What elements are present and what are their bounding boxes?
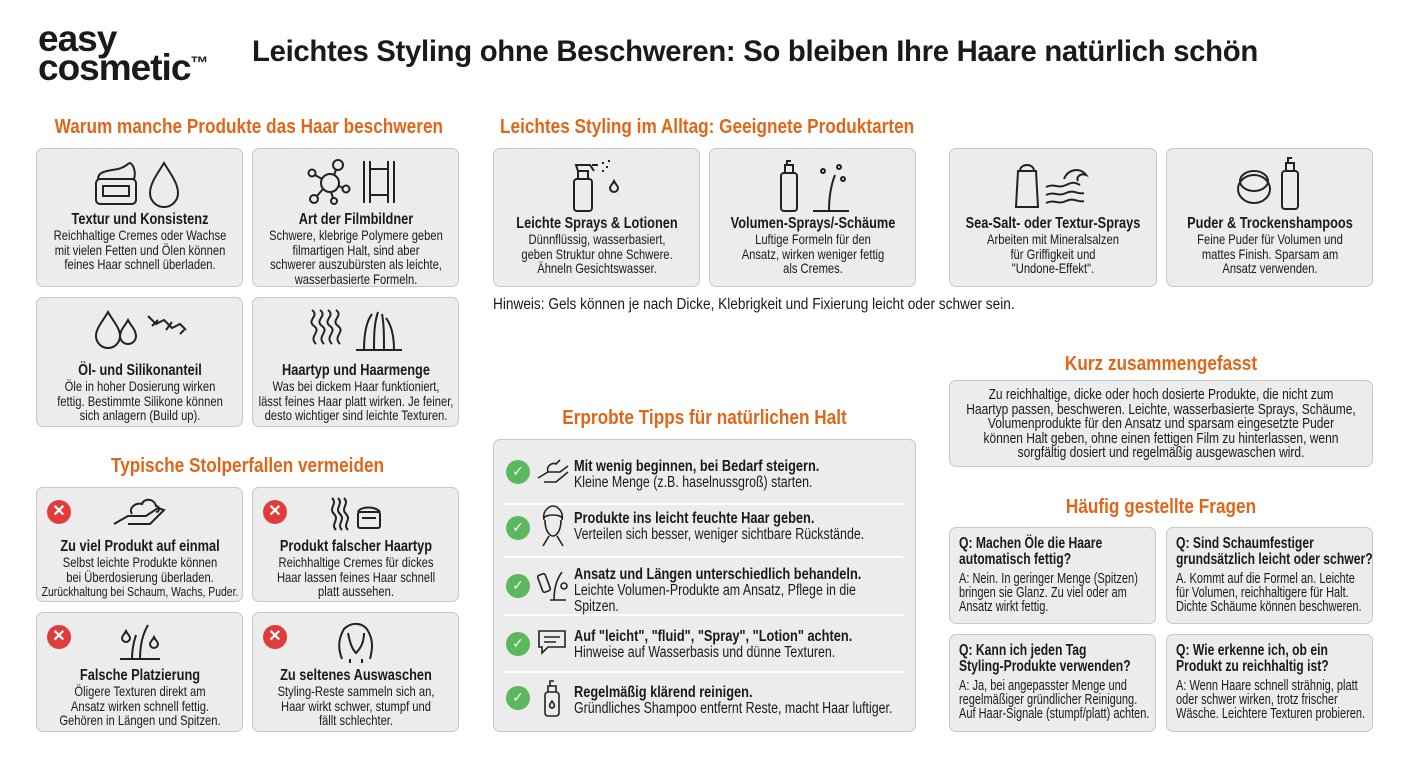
faq 2: Q: Sind Schaumfestiger — [1176, 535, 1314, 552]
tip 3: Leichte Volumen-Produkte am Ansatz, Pflege in die — [574, 582, 856, 599]
card: filmbildner: filmartigen Halt, sind aber — [292, 242, 419, 258]
card: volumen: Ansatz, wirken weniger fettig — [741, 246, 884, 262]
faq 4: Produkt zu reichhaltig ist? — [1176, 658, 1329, 674]
card: falscher haartyp: platt aussehen. — [318, 583, 393, 599]
summary box: Volumenprodukte für den Ansatz und sparsam eingesetzte Puder — [988, 415, 1334, 432]
icon: drops on hair root — [120, 624, 160, 660]
card: falscher haartyp: Produkt falscher Haartyp — [279, 538, 432, 555]
card: haartyp: lässt feines Haar platt wirken. Je feiner, — [258, 392, 453, 408]
card: filmbildner: Art der Filmbildner — [298, 211, 413, 228]
card: textur: Reichhaltige Cremes oder Wachse — [53, 227, 226, 243]
card: falscher haartyp: ✕ — [268, 503, 282, 520]
icon: cream jar and drop — [95, 161, 179, 208]
card: volumen: Luftige Formeln für den — [755, 231, 870, 247]
logo: easy — [38, 18, 116, 59]
card: textur: feines Haar schnell überladen. — [64, 256, 215, 272]
card: textur: Textur und Konsistenz — [71, 211, 208, 228]
tip 2 — [506, 505, 864, 546]
faq 3: A: Ja, bei angepasster Menge und — [959, 678, 1127, 694]
card: zu viel produkt: Zu viel Produkt auf einmal — [60, 538, 219, 555]
heading: faq: Häufig gestellte Fragen — [1066, 496, 1256, 518]
tip 3: Ansatz und Längen unterschiedlich behandeln. — [574, 566, 861, 583]
heading: leichtes styling: Leichtes Styling im Alltag: Geeignete Produktarten — [500, 116, 914, 138]
tip 4: ✓ — [512, 636, 524, 652]
summary box — [949, 380, 1373, 467]
card: filmbildner — [252, 148, 459, 287]
card: platzierung: Gehören in Längen und Spitzen. — [59, 712, 220, 728]
card: sprays: Ähneln Gesichtswasser. — [537, 260, 656, 276]
tip 2: Verteilen sich besser, weniger sichtbare Rückstände. — [574, 526, 864, 543]
tip 3: ✓ — [512, 578, 524, 594]
card: sprays — [493, 148, 700, 287]
card: platzierung: Falsche Platzierung — [79, 667, 200, 684]
card: oel: Öle in hoher Dosierung wirken — [64, 378, 215, 394]
card: sea salt: Arbeiten mit Mineralsalzen — [987, 231, 1119, 247]
faq 4: oder schwer wirken, trotz frischer — [1176, 692, 1338, 708]
icon: hand with foam — [114, 498, 166, 525]
tip 1: Kleine Menge (z.B. haselnussgroß) starten. — [574, 474, 812, 491]
card: volumen — [709, 148, 916, 287]
faq 3: regelmäßiger gründlicher Reinigung. — [959, 692, 1137, 708]
faq 1: Ansatz wirkt fettig. — [959, 599, 1048, 615]
tip 3 — [506, 566, 861, 615]
icon: hair and jar — [331, 497, 381, 531]
card: haartyp: Was bei dickem Haar funktioniert, — [272, 378, 439, 394]
tip 2: Produkte ins leicht feuchte Haar geben. — [574, 510, 814, 527]
faq 1: Q: Machen Öle die Haare — [959, 535, 1102, 552]
card: filmbildner: schwerer auszubürsten als leichte, — [270, 256, 441, 272]
card: filmbildner: Schwere, klebrige Polymere geben — [269, 227, 442, 243]
card: volumen: Volumen-Sprays/-Schäume — [730, 215, 895, 232]
icon: drops and silicone chain — [95, 310, 187, 349]
card: sea salt — [949, 148, 1157, 287]
card: zu viel produkt: Zurückhaltung bei Schaum, Wachs, Puder. — [41, 584, 238, 599]
card: zu viel produkt: ✕ — [52, 503, 66, 520]
card: falscher haartyp: Haar lassen feines Haar schnell — [276, 568, 435, 584]
faq 1: automatisch fettig? — [959, 550, 1071, 568]
faq 3: Auf Haar-Signale (stumpf/platt) achten. — [959, 706, 1149, 722]
logo — [38, 18, 207, 88]
icon: hair strands — [310, 309, 402, 351]
icon: salt shaker and wave — [1014, 164, 1089, 208]
summary box: Haartyp passen, beschweren. Leichte, wasserbasierte Sprays, Schäume, — [966, 401, 1356, 418]
tip 4 — [506, 628, 852, 661]
faq 1 — [949, 527, 1156, 624]
heading: warum: Warum manche Produkte das Haar beschweren — [55, 116, 443, 138]
card: seltenes auswaschen — [252, 612, 459, 732]
card: platzierung: Ansatz wirken schnell fettig. — [70, 698, 209, 714]
tip 2: ✓ — [512, 520, 524, 536]
card: falscher haartyp — [252, 487, 459, 602]
card: zu viel produkt: bei Überdosierung überladen. — [66, 568, 213, 584]
hinweis text: Hinweis: Gels können je nach Dicke, Klebrigkeit und Fixierung leicht oder schwer sein. — [493, 296, 1015, 313]
tip 4: Auf "leicht", "fluid", "Spray", "Lotion" achten. — [574, 628, 852, 645]
faq 3 — [949, 634, 1156, 732]
summary box: Zu reichhaltige, dicke oder hoch dosierte Produkte, die nicht zum — [989, 386, 1333, 403]
summary box: sorgfältig dosiert und regelmäßig ausgewaschen wird. — [1018, 444, 1304, 461]
logo: cosmetic™ — [38, 47, 207, 88]
icon: spray bottle — [573, 160, 619, 212]
card: puder: Feine Puder für Volumen und — [1197, 231, 1342, 247]
heading: stolperfallen: Typische Stolperfallen vermeiden — [111, 455, 384, 477]
card: volumen: als Cremes. — [783, 260, 842, 276]
tip 5: Gründliches Shampoo entfernt Reste, macht Haar luftiger. — [574, 700, 892, 717]
card: puder: Puder & Trockenshampoos — [1187, 215, 1352, 232]
faq 3: Q: Kann ich jeden Tag — [959, 642, 1086, 659]
card: sea salt: "Undone-Effekt". — [1012, 260, 1094, 276]
card: seltenes auswaschen: ✕ — [268, 628, 282, 645]
card: puder: Ansatz verwenden. — [1222, 260, 1317, 276]
tip 3: Spitzen. — [574, 598, 619, 615]
card: sea salt: für Griffigkeit und — [1010, 246, 1096, 262]
faq 2 — [1166, 527, 1373, 624]
card: oel: Öl- und Silikonanteil — [78, 362, 201, 379]
card: sprays: geben Struktur ohne Schwere. — [521, 246, 672, 262]
icon: compact and dry shampoo — [1237, 157, 1299, 210]
tip 5: ✓ — [512, 690, 524, 706]
card: puder — [1166, 148, 1373, 287]
faq 2: für Volumen, reichhaltigere für Halt. — [1176, 585, 1349, 601]
faq 4 — [1166, 634, 1373, 732]
faq 4: Wäsche. Leichtere Texturen probieren. — [1176, 706, 1365, 722]
card: sprays: Dünnflüssig, wasserbasiert, — [528, 231, 665, 247]
card: seltenes auswaschen: Styling-Reste sammeln sich an, — [277, 683, 434, 699]
card: seltenes auswaschen: Zu seltenes Auswaschen — [280, 667, 431, 684]
icon: mousse can and hair — [780, 160, 849, 212]
icon: flat hair head — [338, 622, 373, 663]
card: platzierung: Öligere Texturen direkt am — [74, 683, 205, 699]
card: seltenes auswaschen: Haar wirkt schwer, stumpf und — [280, 698, 430, 714]
card: haartyp: Haartyp und Haarmenge — [282, 362, 429, 379]
tip 4: Hinweise auf Wasserbasis und dünne Texturen. — [574, 644, 835, 661]
faq 2: grundsätzlich leicht oder schwer? — [1176, 550, 1373, 568]
tip 5 — [506, 680, 892, 717]
icon: molecule and film — [308, 159, 395, 205]
card: haartyp: desto wichtiger sind leichte Texturen. — [264, 407, 447, 423]
card: oel — [36, 297, 243, 427]
summary box: können Halt geben, ohne einen fettigen Film zu hinterlassen, wenn — [984, 430, 1338, 447]
card: zu viel produkt: Selbst leichte Produkte können — [62, 554, 217, 570]
tip 5: Regelmäßig klärend reinigen. — [574, 684, 753, 701]
faq 4: A: Wenn Haare schnell strähnig, platt — [1176, 678, 1358, 694]
card: haartyp — [252, 297, 459, 427]
card: platzierung — [36, 612, 243, 732]
card: falscher haartyp: Reichhaltige Cremes für dickes — [278, 554, 433, 570]
faq 1: bringen sie Glanz. Zu viel oder am — [959, 585, 1127, 601]
card: sprays: Leichte Sprays & Lotionen — [516, 215, 677, 232]
card: puder: mattes Finish. Sparsam am — [1201, 246, 1338, 262]
card: zu viel produkt — [36, 487, 243, 602]
tip 1: ✓ — [512, 464, 524, 480]
tip 1: Mit wenig beginnen, bei Bedarf steigern. — [574, 458, 819, 475]
tip 1 — [506, 458, 819, 491]
title: Leichtes Styling ohne Beschweren: So bleiben Ihre Haare natürlich schön — [252, 35, 1258, 68]
faq 1: A: Nein. In geringer Menge (Spitzen) — [959, 571, 1138, 587]
card: oel: fettig. Bestimmte Silikone können — [57, 392, 222, 408]
heading: kurz zusammengefasst: Kurz zusammengefasst — [1065, 353, 1257, 375]
card: textur — [36, 148, 243, 287]
faq 2: Dichte Schäume können beschweren. — [1176, 599, 1362, 615]
faq 2: A. Kommt auf die Formel an. Leichte — [1176, 571, 1355, 587]
card: seltenes auswaschen: fällt schlechter. — [318, 712, 393, 728]
faq 3: Styling-Produkte verwenden? — [959, 658, 1131, 674]
panel: tipps — [493, 439, 916, 732]
card: oel: sich anlagern (Build up). — [79, 407, 200, 423]
card: textur: mit vielen Fetten und Ölen können — [54, 242, 225, 258]
faq 4: Q: Wie erkenne ich, ob ein — [1176, 642, 1328, 659]
card: filmbildner: wasserbasierte Formeln. — [294, 270, 417, 286]
heading: tipps: Erprobte Tipps für natürlichen Halt — [562, 407, 847, 429]
card: sea salt: Sea-Salt- oder Textur-Sprays — [966, 215, 1140, 232]
card: platzierung: ✕ — [52, 628, 66, 645]
